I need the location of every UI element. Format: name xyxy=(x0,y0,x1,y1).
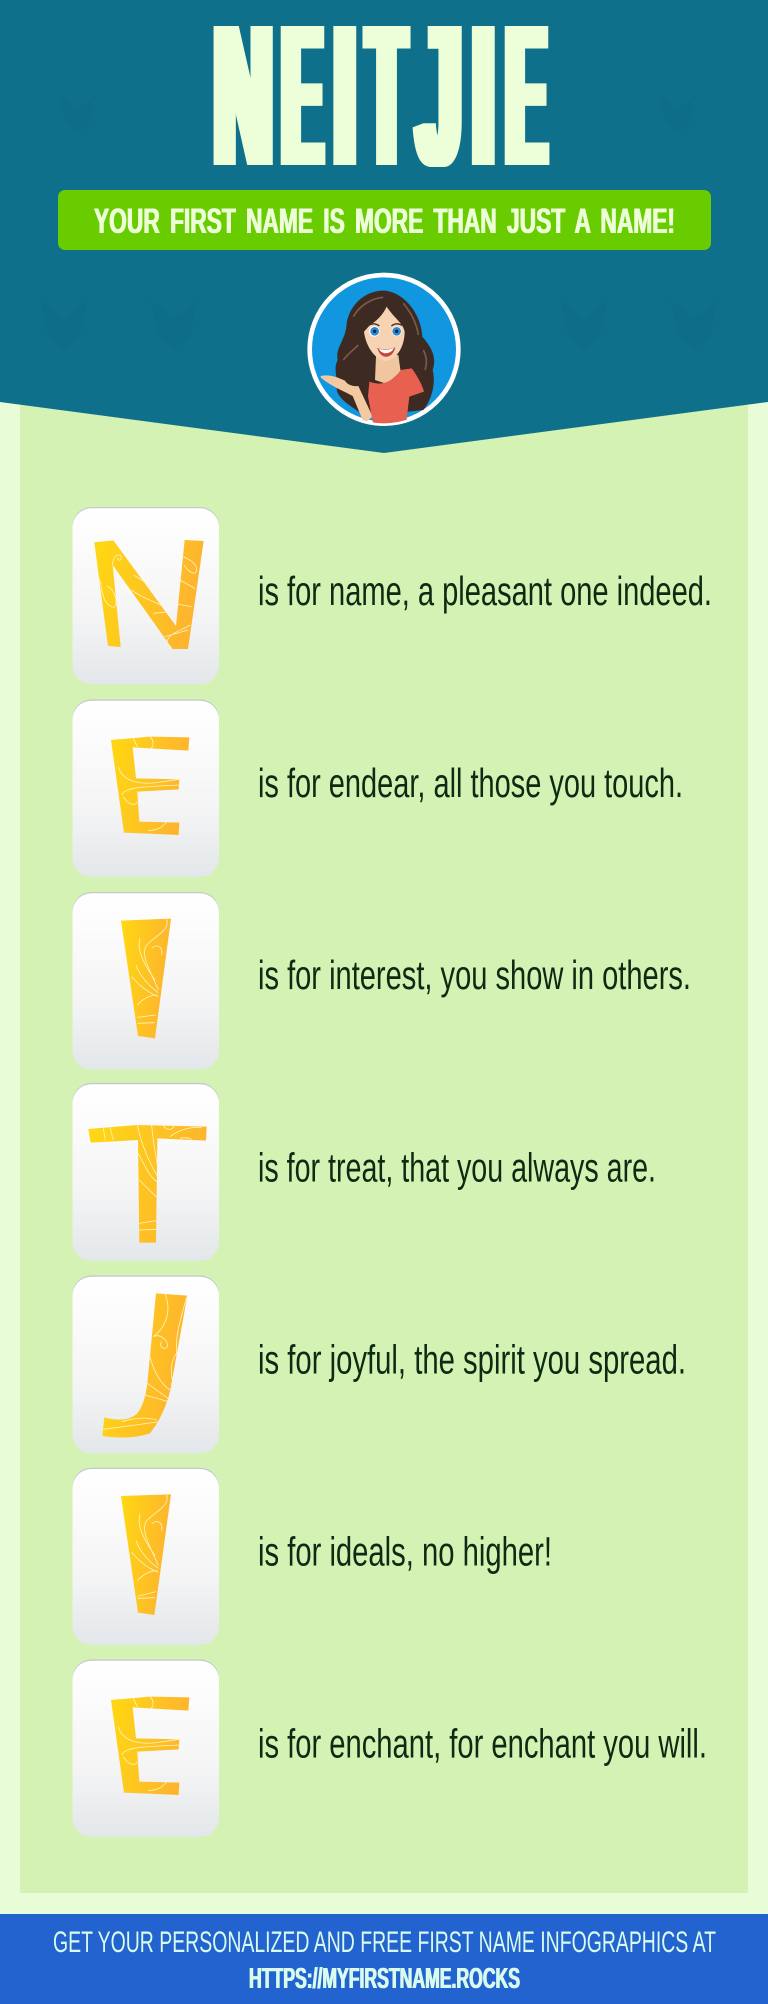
avatar: cartoon woman xyxy=(310,275,458,425)
title xyxy=(214,0,546,208)
row 1: letter N tile xyxy=(72,507,219,684)
subtitle banner xyxy=(58,190,711,250)
row 4: letter T tile xyxy=(72,1083,219,1261)
footer: HTTPS://MYFIRSTNAME.ROCKS xyxy=(249,1963,520,1995)
row 3: letter I tile xyxy=(72,892,219,1069)
row 6: letter I tile xyxy=(72,1468,219,1645)
content panel xyxy=(20,390,748,1893)
row 6 text: is for ideals, no higher! xyxy=(258,1528,552,1574)
footer xyxy=(0,1914,768,2004)
row 7: letter E tile xyxy=(72,1659,219,1837)
row 2: letter E tile xyxy=(72,699,219,877)
row 5: letter J tile xyxy=(72,1275,219,1453)
header chevron xyxy=(0,0,768,453)
